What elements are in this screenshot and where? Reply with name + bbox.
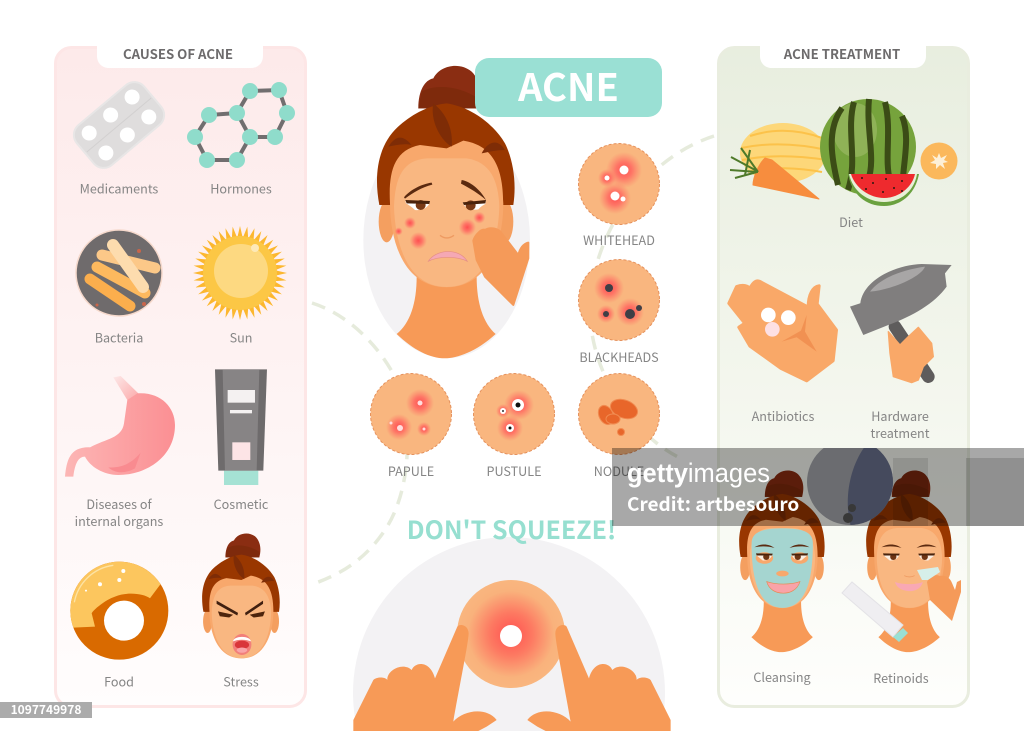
circle: papule bbox=[370, 374, 452, 454]
illustration: squeezing a pimple bbox=[353, 537, 671, 731]
panel: acne treatment bbox=[718, 44, 968, 706]
circle: nodule bbox=[578, 374, 660, 454]
label: nodule: NODULE bbox=[594, 461, 644, 480]
causes heading tab bbox=[97, 44, 263, 68]
label: hardware treatment bbox=[870, 406, 930, 442]
circle: blackheads bbox=[578, 260, 660, 340]
illustration: retinoids application bbox=[842, 471, 961, 652]
label: diet: Diet bbox=[839, 212, 863, 231]
watermark text bbox=[627, 458, 799, 517]
watermark band bbox=[612, 448, 1024, 526]
image id label: 1097749978 bbox=[11, 701, 81, 718]
label: retinoids: Retinoids bbox=[873, 668, 929, 687]
icon: antibiotics on hand bbox=[729, 281, 836, 381]
icon: medicaments blister pack bbox=[69, 77, 169, 173]
label: antibiotics: Antibiotics bbox=[752, 406, 814, 425]
panel: causes of acne bbox=[56, 44, 306, 706]
connector dashed lines bbox=[310, 136, 714, 585]
icon: bacteria bbox=[76, 230, 162, 316]
icon: donut bbox=[70, 562, 168, 660]
causes heading tab: CAUSES OF ACNE bbox=[123, 44, 233, 63]
label: sun: Sun bbox=[230, 328, 252, 346]
treatment heading tab bbox=[760, 44, 926, 68]
circle: pustule bbox=[474, 374, 554, 454]
label: papule: PAPULE bbox=[388, 461, 434, 480]
icon: cosmetic tube bbox=[215, 369, 267, 485]
circle: whitehead bbox=[578, 144, 660, 224]
label: food: Food bbox=[104, 672, 134, 690]
watermark text: Credit: artbesouro bbox=[627, 490, 799, 517]
label: hardware treatment: treatment bbox=[870, 423, 930, 442]
illustration: cleansing face mask bbox=[739, 471, 825, 652]
illustration: girl with acne bbox=[363, 66, 530, 358]
icon: hardware treatment device bbox=[850, 264, 952, 383]
label: cosmetic: Cosmetic bbox=[214, 494, 269, 513]
label: hormones: Hormones bbox=[210, 178, 272, 198]
watermark text: gettyimages bbox=[627, 458, 770, 488]
icon: diet fruits and vegetables bbox=[730, 99, 958, 206]
label: medicaments: Medicaments bbox=[80, 178, 158, 198]
icon: sun bbox=[174, 213, 299, 339]
title badge: ACNE: ACNE bbox=[517, 57, 619, 112]
label: diseases of internal organs bbox=[75, 494, 163, 530]
icon: stressed face bbox=[202, 533, 280, 658]
label: cleansing: Cleansing bbox=[753, 667, 811, 686]
label: diseases of internal organs: internal organs bbox=[75, 511, 163, 530]
label: pustule: PUSTULE bbox=[486, 461, 542, 480]
heading: don't squeeze: DON'T SQUEEZE! bbox=[407, 511, 616, 547]
label: stress: Stress bbox=[223, 672, 259, 690]
label: bacteria: Bacteria bbox=[95, 328, 143, 346]
treatment heading tab: ACNE TREATMENT bbox=[783, 44, 900, 63]
title badge: ACNE bbox=[475, 57, 662, 117]
label: hardware treatment: Hardware bbox=[871, 406, 929, 425]
label: whitehead: WHITEHEAD bbox=[583, 230, 655, 249]
label: diseases of internal organs: Diseases of bbox=[86, 494, 153, 513]
icon: stomach bbox=[65, 376, 175, 477]
label: blackheads: BLACKHEADS bbox=[579, 347, 659, 366]
icon: hormones molecule bbox=[187, 82, 295, 168]
